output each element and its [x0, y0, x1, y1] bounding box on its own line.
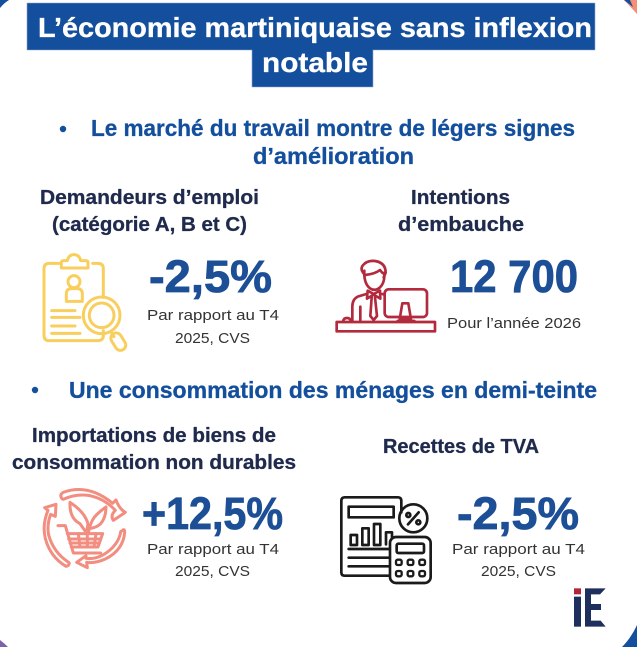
label: importations: consommation non durables	[12, 452, 296, 474]
label: recettes de TVA: Recettes de TVA	[383, 436, 539, 458]
stat: +12,5 %: Par rapport au T4	[147, 541, 279, 558]
stat: +12,5 %	[142, 488, 283, 580]
label: importations	[12, 425, 296, 474]
label: demandeurs d'emploi: Demandeurs d’emploi	[40, 187, 259, 209]
icon: employee at computer	[337, 261, 435, 331]
heading: consommation des ménages: Une consommation des ménages en demi-teinte	[69, 377, 597, 403]
logo: IE	[574, 588, 606, 627]
stat: -2,5 % TVA: -2,5%	[457, 488, 579, 539]
corner: bottom left	[0, 640, 8, 647]
label: intentions d'embauche: Intentions	[411, 187, 510, 209]
stat: -2,5 % TVA: 2025, CVS	[481, 563, 556, 580]
stat: -2,5 % demandeurs	[147, 251, 279, 347]
corner: bottom right	[622, 625, 637, 647]
title	[27, 3, 595, 87]
label: importations: Importations de biens de	[32, 425, 276, 447]
stat: -2,5 % demandeurs: -2,5%	[149, 251, 272, 302]
stat: -2,5 % demandeurs: Par rapport au T4	[147, 307, 279, 324]
title: L’économie martiniquaise sans inflexion	[38, 12, 592, 43]
title: notable	[262, 47, 368, 78]
stat: 12 700: 12 700	[450, 251, 578, 302]
stat: -2,5 % TVA: Par rapport au T4	[452, 541, 585, 558]
stat: -2,5 % TVA	[452, 488, 585, 580]
heading: marché du travail: Le marché du travail montre de légers signes	[91, 115, 575, 141]
label: demandeurs d'emploi: (catégorie A, B et C)	[52, 214, 247, 236]
stat: -2,5 % demandeurs: 2025, CVS	[175, 330, 250, 347]
label: intentions d'embauche: d’embauche	[398, 214, 524, 236]
stat: 12 700: Pour l’année 2026	[447, 315, 581, 332]
stat: 12 700	[447, 251, 581, 332]
stat: +12,5 %: +12,5%	[142, 488, 283, 539]
icon: report and calculator	[341, 497, 431, 583]
label: demandeurs d'emploi	[40, 187, 259, 236]
heading: marché du travail: d’amélioration	[253, 143, 414, 169]
icon: recycling cart with plant	[44, 490, 125, 568]
corner: top left	[0, 0, 9, 8]
icon: clipboard with magnifier	[44, 255, 128, 352]
corner: top right	[624, 0, 637, 14]
label: intentions d'embauche	[398, 187, 524, 236]
heading: marché du travail	[60, 115, 575, 169]
stat: +12,5 %: 2025, CVS	[175, 563, 250, 580]
